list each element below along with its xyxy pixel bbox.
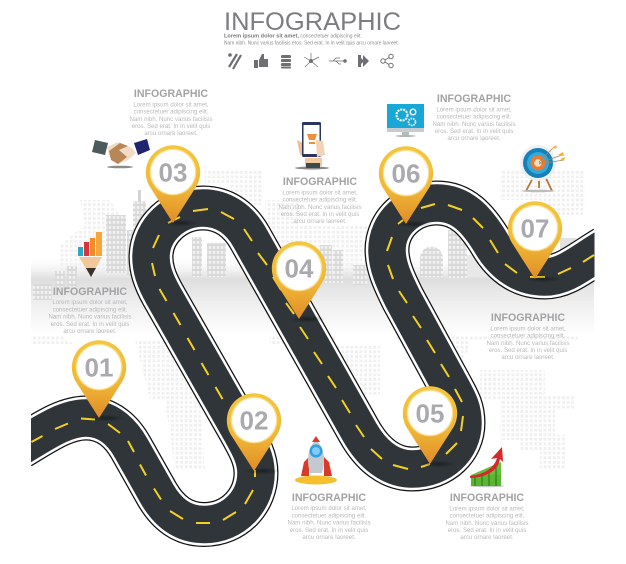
text block: step 5: INFOGRAPHIC [450,492,524,504]
icon: tools [228,53,241,69]
text block: step 6: Lorem ipsum dolor sit amet, [436,106,512,113]
text block: step 3: consectetuer adipiscing elit. [134,109,209,116]
icon: thumbs up [254,54,268,68]
text block: step 3 [130,88,212,137]
icon: archery target [520,145,565,192]
pin 07 [508,201,562,282]
pin 02 [227,393,281,474]
icon row [228,53,393,69]
icon: network [304,53,319,67]
icon: growth arrow chart [470,447,504,487]
icon: pencil bar chart [78,232,102,277]
text block: step 2: eros. Sed erat. In in velit quis [290,527,368,534]
text block: step 2: Lorem ipsum dolor sit amet, [291,505,367,512]
pin 07: 07 [521,214,549,244]
icon: fast forward [358,55,369,67]
subtitle [224,34,399,46]
text block: step 5: eros. Sed erat. In in velit quis [448,527,526,534]
text block: step 3: INFOGRAPHIC [134,88,208,100]
icon: usb [329,58,347,64]
road [20,203,605,524]
background: grey city skyline [31,190,594,335]
text block: step 2: Nam nibh. Nunc varius facilisis [288,520,370,527]
text block: step 7: eros. Sed erat. In in velit quis [489,347,567,354]
text block: step 7: Nam nibh. Nunc varius facilisis [487,340,569,347]
text block: step 7: consectetuer adipiscing elit. [491,333,566,340]
pin 06 [379,146,433,228]
text block: step 5 [446,492,528,541]
text block: step 4: Nam nibh. Nunc varius facilisis [279,204,361,211]
text block: step 5: arcu ornare laoreet. [460,534,514,541]
pin 01: 01 [85,352,113,382]
pin 06: 06 [392,158,420,188]
pin 03: 03 [159,158,187,188]
pin 04 [272,241,326,322]
pin 04: 04 [285,254,314,284]
title: INFOGRAPHIC [224,8,401,36]
icon: handshake [92,139,150,168]
text block: step 4: consectetuer adipiscing elit. [283,197,358,204]
text block: step 7: arcu ornare laoreet. [501,354,555,361]
text block: step 2: arcu ornare laoreet. [302,534,356,541]
text block: left [49,286,131,335]
icon: rocket [295,436,337,484]
text block: step 7: INFOGRAPHIC [491,312,565,324]
text block: step 7 [487,312,569,361]
pin 01 [72,340,126,422]
text block: step 3: Lorem ipsum dolor sit amet, [133,101,209,108]
icon: monitor with gears [387,104,424,137]
pin 03 [146,145,200,226]
text block: step 6: INFOGRAPHIC [437,93,511,105]
text block: step 3: arcu ornare laoreet. [144,130,198,137]
text block: step 2: consectetuer adipiscing elit. [292,512,367,519]
text block: step 4: eros. Sed erat. In in velit quis [281,211,359,218]
text block: step 4: arcu ornare laoreet. [293,218,347,225]
pin 02: 02 [240,406,268,436]
text block: step 7: Lorem ipsum dolor sit amet, [490,325,566,332]
pin 05 [403,386,457,468]
icon: phone in hand [295,122,329,170]
text block: step 3: Nam nibh. Nunc varius facilisis [130,116,212,123]
text block: step 5: Nam nibh. Nunc varius facilisis [446,520,528,527]
text block: step 2: INFOGRAPHIC [292,492,366,504]
text block: left: arcu ornare laoreet. [63,328,117,335]
text block: step 5: consectetuer adipiscing elit. [450,513,525,520]
subtitle: Nam nibh. Nunc varius facilisis eros. Sed erat. In in velit quis arcu ornare laoreet. [224,40,399,46]
text block: step 6: Nam nibh. Nunc varius facilisis [433,121,515,128]
text block: step 2 [288,492,370,541]
text block: left: Nam nibh. Nunc varius facilisis [49,314,131,321]
icon: database [281,55,291,68]
subtitle: Lorem ipsum dolor sit amet, consectetuer adipiscing elit. [224,34,362,40]
text block: left: eros. Sed erat. In in velit quis [51,321,129,328]
text block: step 6: consectetuer adipiscing elit. [437,114,512,121]
text block: step 4: INFOGRAPHIC [283,176,357,188]
text block: step 4 [279,176,361,225]
text block: step 3: eros. Sed erat. In in velit quis [132,123,210,130]
icon: share [381,54,393,68]
text block: step 5: Lorem ipsum dolor sit amet, [449,505,525,512]
text block: left: INFOGRAPHIC [53,286,127,298]
text block: step 6: eros. Sed erat. In in velit quis [435,128,513,135]
road centre dashes [32,204,594,523]
text block: left: Lorem ipsum dolor sit amet, [52,299,128,306]
text block: step 6 [433,93,515,142]
pin 05: 05 [416,398,444,428]
text block: left: consectetuer adipiscing elit. [53,306,128,313]
background: dotted world map [31,165,585,470]
text block: step 4: Lorem ipsum dolor sit amet, [282,189,358,196]
text block: step 6: arcu ornare laoreet. [447,135,501,142]
